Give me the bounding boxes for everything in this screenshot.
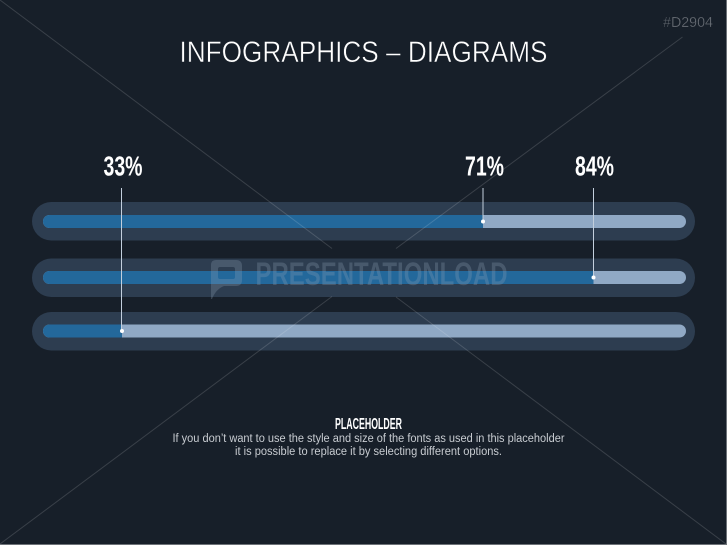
placeholder heading: PLACEHOLDER <box>335 416 402 433</box>
marker: 71%: 71% <box>465 150 504 182</box>
placeholder line 2: it is possible to replace it by selecting different options. <box>235 446 502 458</box>
text block: placeholder <box>172 416 565 458</box>
marker: 33%: 33% <box>104 150 143 182</box>
marker: 84%: 84% <box>575 150 614 182</box>
icon: speech bubble <box>211 260 242 299</box>
placeholder line 1: If you don’t want to use the style and size of the fonts as used in this placeholder <box>172 433 565 445</box>
watermark text: PRESENTATIONLOAD <box>256 256 508 292</box>
bar 1: 71% <box>32 202 695 240</box>
watermark logo <box>211 256 508 299</box>
marker: 71% <box>465 150 504 224</box>
marker: 84% <box>575 150 614 280</box>
bar 3: 33% <box>32 312 695 350</box>
title: INFOGRAPHICS – DIAGRAMS <box>180 36 548 69</box>
reference code: #D2904 <box>663 14 713 31</box>
marker: 33% <box>104 150 143 333</box>
bar 2: 84% <box>32 258 695 297</box>
